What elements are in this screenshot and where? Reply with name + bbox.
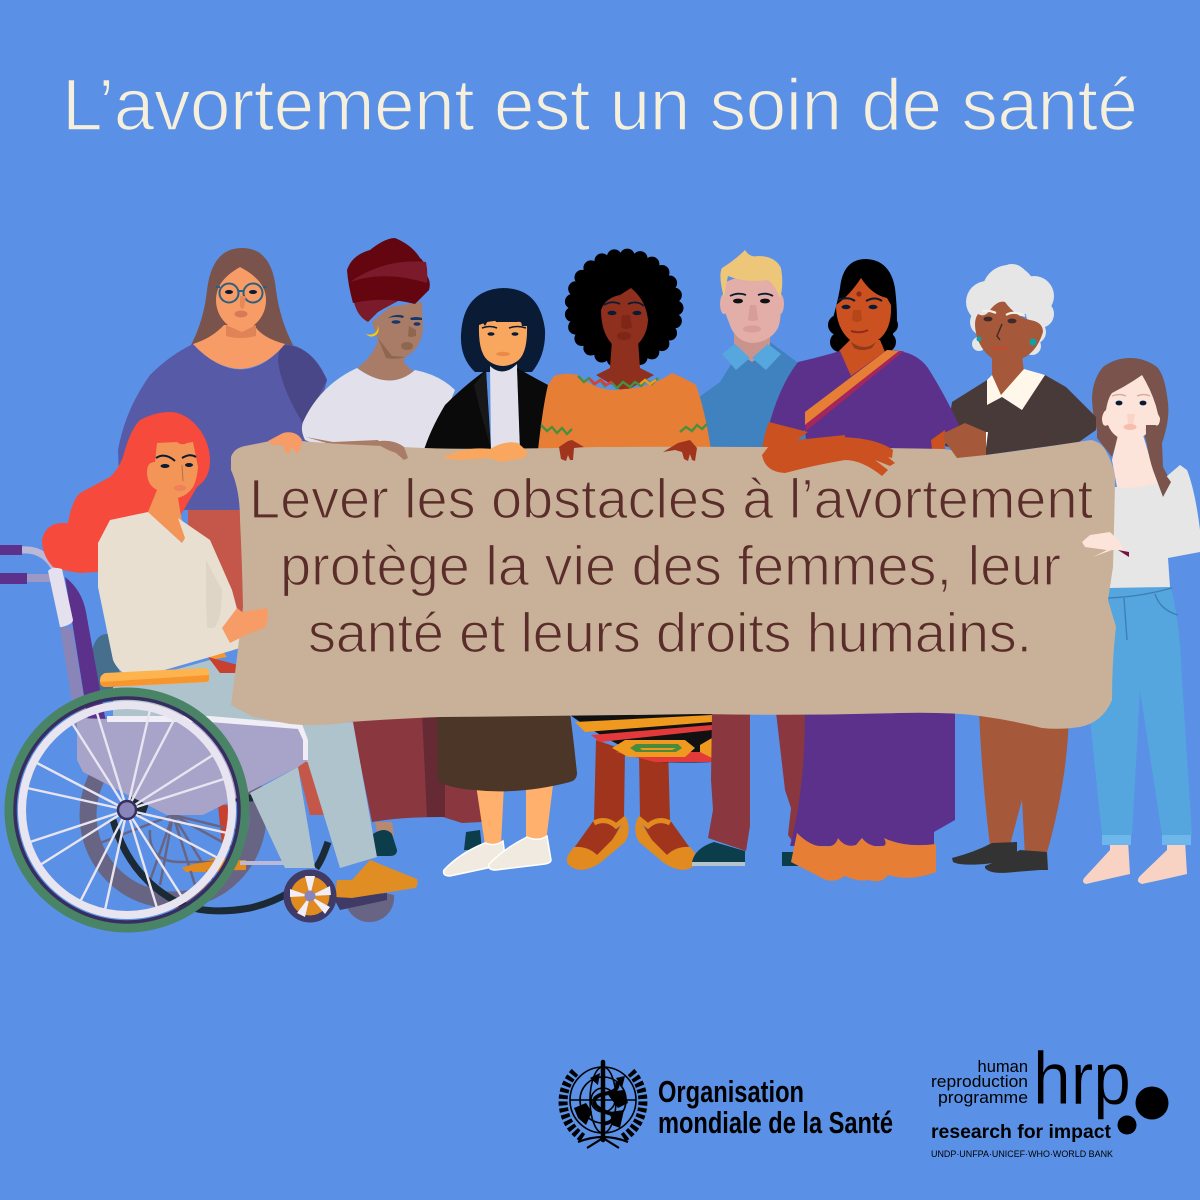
- figure: woman with glasses: [118, 248, 327, 510]
- seat: [77, 716, 308, 815]
- woman in kente skirt: patterned skirt: [566, 712, 712, 762]
- WHO logo: [563, 1062, 893, 1148]
- line programme: programme: [938, 1089, 1028, 1107]
- afro woman: left hand: [559, 440, 584, 461]
- waist accents: [208, 651, 238, 673]
- orange shoulder behind sweater: [931, 430, 945, 450]
- neck and chest: [193, 325, 285, 369]
- line human: human: [978, 1058, 1028, 1076]
- turban: [347, 238, 430, 304]
- earring: [366, 325, 379, 337]
- turtleneck: [490, 364, 520, 450]
- jacket: [423, 368, 548, 453]
- serpent: [594, 1082, 617, 1124]
- continents: [574, 1073, 628, 1128]
- red-orange accents: [182, 805, 246, 871]
- hip blob: [125, 790, 152, 815]
- face: [1102, 375, 1160, 440]
- frame post: [60, 627, 90, 733]
- bob woman: hand: [442, 442, 528, 462]
- hair: [828, 259, 898, 352]
- blouse fold: [206, 560, 222, 628]
- glasses: [216, 284, 267, 302]
- fringe: [472, 305, 534, 326]
- programme name: [931, 1058, 1028, 1107]
- armrest: [100, 668, 209, 687]
- neck shadow: [226, 325, 256, 338]
- line 2: protège la vie des femmes, leur: [280, 534, 1061, 597]
- woman on the right: feet: [1083, 840, 1187, 884]
- face: [836, 278, 891, 346]
- rear wheel: [88, 730, 258, 900]
- woman in kente skirt: sandals: [567, 818, 697, 870]
- footplate: [333, 893, 387, 910]
- backrest: [65, 577, 108, 733]
- blue triangle gap: [793, 430, 806, 440]
- hair: [191, 248, 293, 345]
- purple sari blouse: [769, 350, 959, 450]
- white hair: [966, 264, 1054, 355]
- small rear wheel: [345, 893, 394, 922]
- woman in purple: lower skirt strip and shoes: [182, 760, 325, 872]
- figure: woman in dark sweater: [945, 264, 1096, 456]
- face: [216, 267, 266, 330]
- handle grip: [48, 568, 73, 627]
- woman in turban: long skirt: [350, 712, 482, 856]
- figure: woman in sari, upper body: [762, 259, 959, 473]
- figure: man in blue shirt: [684, 250, 810, 450]
- ears: [720, 294, 784, 314]
- turban woman: hand: [373, 441, 408, 460]
- woman in sari: sari skirt: [790, 712, 955, 881]
- neck and face: [357, 302, 423, 381]
- face details: [982, 311, 1025, 349]
- banner message: [249, 467, 1093, 664]
- WHO wordmark: [658, 1074, 893, 1140]
- blouse: [118, 344, 327, 510]
- WHO emblem: [563, 1062, 643, 1148]
- afro woman: right hand: [663, 440, 697, 461]
- man: trousers and shoes: [692, 712, 808, 866]
- figure group: people lower bodies: [182, 508, 1192, 884]
- woman on the right: arm and hand: [1082, 532, 1123, 557]
- figure: woman with afro: [538, 256, 711, 450]
- braid: [1146, 425, 1171, 497]
- hair: [720, 250, 782, 298]
- woman in dark sweater: hand: [944, 423, 986, 458]
- hair: [1092, 358, 1171, 497]
- eyes, brows and lips: [482, 326, 526, 356]
- woman on the right: jeans: [1088, 585, 1192, 845]
- woman in black jacket: white sneakers: [444, 836, 551, 876]
- hrp letters: hrp: [1033, 1037, 1131, 1120]
- eyes and features: [604, 302, 644, 340]
- sleeve shade: [278, 345, 327, 425]
- line 1: Organisation: [658, 1074, 804, 1109]
- red hair: [42, 412, 210, 573]
- shirt: [684, 342, 810, 450]
- orange sari hand: [762, 437, 895, 476]
- big wheel hub: [118, 801, 136, 819]
- line 1: Lever les obstacles à l’avortement: [249, 467, 1093, 530]
- neck and chest: [1112, 435, 1160, 488]
- HRP logo: [931, 1037, 1168, 1160]
- woman in black jacket: brown skirt: [437, 712, 577, 791]
- embroidery: [541, 376, 707, 434]
- face: [723, 276, 781, 343]
- collar: [722, 344, 781, 370]
- trousers, front leg: [307, 722, 377, 868]
- line 2: mondiale de la Santé: [658, 1105, 893, 1140]
- globe: [570, 1067, 636, 1133]
- woman in purple: skirt: [188, 508, 250, 640]
- trousers, thigh: [113, 660, 308, 762]
- collar: [987, 369, 1045, 410]
- wheelchair rear pipes and handles: [0, 545, 57, 584]
- arm: [306, 437, 384, 448]
- neck: [992, 355, 1024, 397]
- sponsors: UNDP·UNFPA·UNICEF·WHO·WORLD BANK: [931, 1149, 1114, 1160]
- tagline: research for impact: [931, 1121, 1111, 1143]
- orange blouse: [538, 373, 711, 450]
- banner: [231, 439, 1116, 729]
- figure: woman with black bob: [423, 288, 548, 453]
- woman in kente skirt: legs: [574, 740, 690, 856]
- neck: [734, 330, 770, 362]
- eyes, nose and mouth: [730, 294, 773, 333]
- lower turban wrap: [353, 296, 408, 322]
- white cuff line: [983, 432, 988, 456]
- eyes, nose and lips: [225, 290, 257, 318]
- teal earrings: [976, 336, 1036, 346]
- footrest frame: [240, 845, 313, 865]
- sash: [805, 350, 904, 431]
- face: [479, 320, 527, 366]
- big wheel rim: [9, 692, 245, 928]
- face details: [838, 291, 882, 350]
- wheelchair woman: hand: [222, 608, 268, 643]
- seat cushion back: [90, 634, 125, 690]
- trousers, rear leg: [250, 767, 315, 868]
- face: [601, 288, 648, 351]
- white t-shirt: [302, 368, 455, 450]
- black frame: [113, 798, 328, 911]
- eyes and lips: [1112, 394, 1150, 430]
- woman on the right: nail polish: [1118, 550, 1129, 557]
- title: L’avortement est un soin de santé: [62, 65, 1138, 146]
- neck: [838, 340, 885, 396]
- figure: woman with turban: [302, 238, 455, 450]
- big wheel spokes: [27, 710, 227, 910]
- hair: [461, 288, 545, 372]
- figure: woman in wheelchair: [0, 412, 418, 928]
- rear spokes: [95, 815, 255, 895]
- laurel wreath: [563, 1072, 643, 1138]
- dark sweater: [945, 375, 1096, 455]
- orange arm: [762, 422, 845, 473]
- woman in black jacket: legs: [476, 785, 553, 845]
- woman in dark sweater: legs and shoes: [952, 712, 1069, 873]
- top: [1108, 465, 1200, 588]
- cream blouse: [98, 512, 240, 679]
- line 3: santé et leurs droits humains.: [308, 601, 1032, 664]
- face: [975, 302, 1043, 364]
- neck: [596, 340, 654, 392]
- dots: [1118, 1086, 1168, 1134]
- facial features: [156, 455, 196, 491]
- hands on banner: [222, 423, 1129, 643]
- afro hair: [570, 256, 678, 360]
- figure: woman on the right: [1092, 358, 1200, 588]
- wreath ties: [578, 1137, 628, 1148]
- staff: [601, 1062, 605, 1140]
- neck and face: [147, 442, 198, 543]
- orange shoe: [335, 860, 418, 898]
- eyes and lips: [388, 315, 422, 350]
- line reproduction: reproduction: [931, 1073, 1028, 1091]
- front caster: [287, 873, 333, 919]
- purple blouse woman: hand: [268, 432, 302, 454]
